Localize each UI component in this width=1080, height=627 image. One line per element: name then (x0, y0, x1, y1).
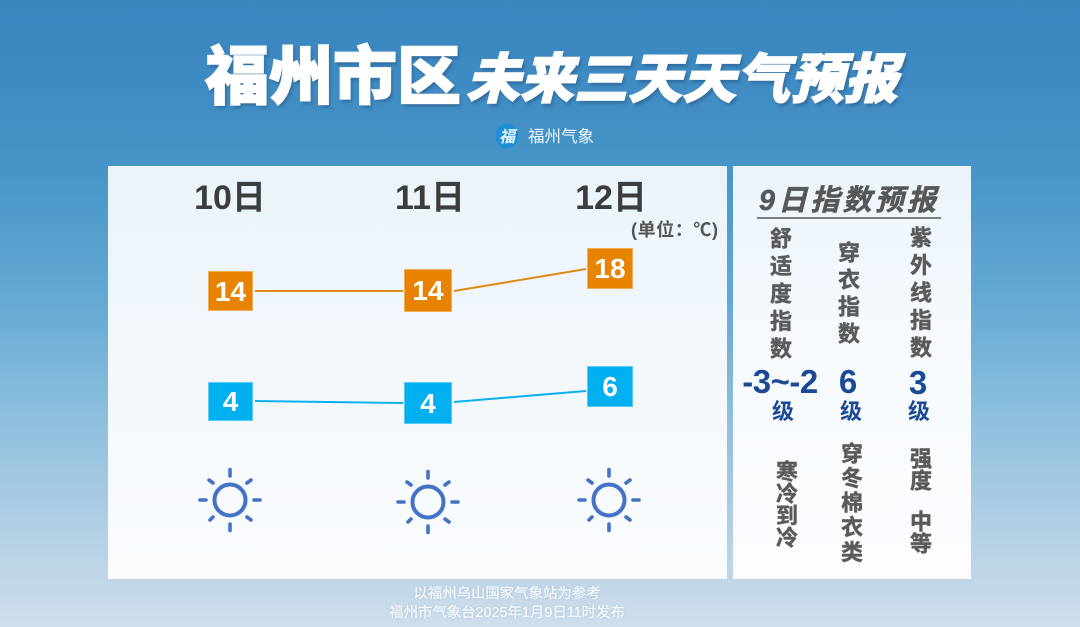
high temperature 10日: 14 (215, 276, 246, 306)
low temperature 12日: 6 (602, 371, 618, 402)
value: UV level: 3 (909, 364, 927, 401)
description: comfort: 寒冷到冷 (773, 460, 798, 548)
unit: clothing grade: 级 (840, 399, 862, 424)
date: 10日: 10日 (194, 179, 266, 217)
low temperature 11日 (404, 382, 452, 424)
label: clothing index: 穿衣指数 (835, 241, 860, 349)
date: 11日: 11日 (395, 179, 465, 217)
unit: comfort grade: 级 (772, 399, 794, 424)
brand name: 福州气象 (528, 128, 594, 146)
footer source note: 以福州乌山国家气象站为参考 (413, 586, 601, 602)
high temperature 12日: 18 (594, 253, 626, 284)
icon: logo (496, 124, 518, 148)
high temperature 11日 (404, 269, 452, 312)
title (204, 41, 908, 113)
low temperature 11日: 4 (420, 388, 436, 418)
icon: sun 11日 (396, 470, 460, 534)
heading: index forecast: 9日指数预报 (759, 185, 939, 217)
unit label: (单位：℃) (631, 220, 719, 240)
label: comfort index: 舒适度指数 (767, 227, 792, 364)
description: UV strength: 强度 (907, 447, 932, 491)
icon: sun 12日 (577, 468, 641, 532)
icon: sun 10日 (198, 468, 262, 532)
panel: three-day temperature forecast (108, 166, 727, 579)
low temperature 10日 (208, 382, 253, 421)
footer source note: 福州市气象台2025年1月9日11时发布 (389, 605, 625, 621)
date: 12日: 12日 (575, 179, 647, 217)
high temperature 11日: 14 (412, 275, 444, 306)
low temperature 10日: 4 (223, 386, 238, 417)
title: forecast subtitle: 未来三天天气预报 (466, 50, 898, 110)
high temperature 10日 (208, 271, 253, 311)
description: clothing: 穿冬棉衣类 (838, 442, 863, 565)
panel: index forecast (733, 166, 971, 579)
low temperature 12日 (587, 366, 633, 407)
icon: logo: 福 (499, 128, 518, 146)
high temperature 12日 (587, 248, 633, 289)
label: UV index: 紫外线指数 (907, 226, 932, 364)
footer source note (389, 586, 625, 621)
value: clothing level: 6 (839, 363, 857, 400)
value: comfort level: -3~-2 (742, 363, 818, 400)
unit: UV grade: 级 (908, 399, 930, 424)
title: city name: 福州市区 (205, 41, 461, 113)
description: UV level text: 中等 (907, 510, 932, 554)
brand: Fuzhou Meteorology logo and name (496, 124, 594, 148)
